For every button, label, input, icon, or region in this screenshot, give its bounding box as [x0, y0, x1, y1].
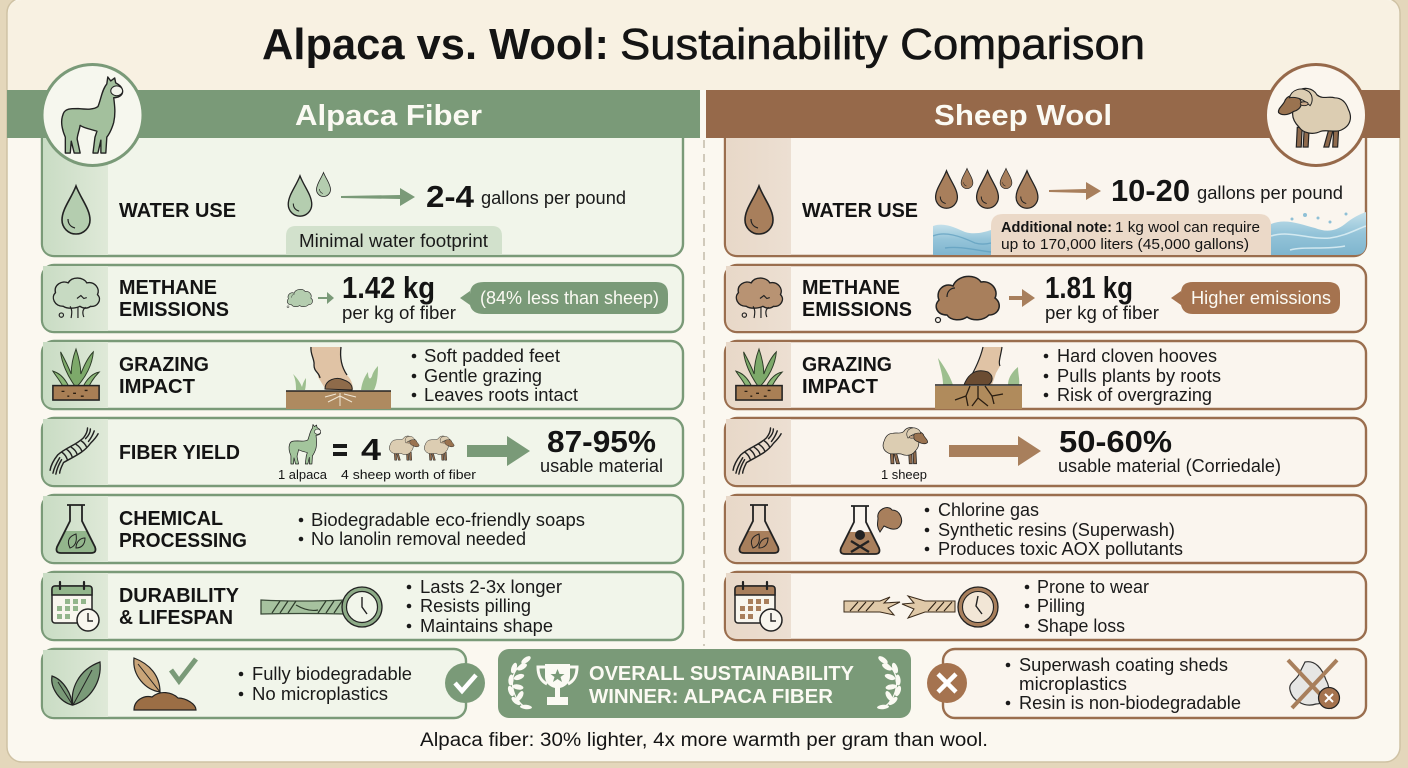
bullets: durability: Resists pilling	[420, 596, 531, 616]
winner text	[589, 663, 855, 708]
sheep icon and caption: 1 sheep	[881, 467, 927, 482]
icon: laurel right	[877, 655, 902, 710]
label: methane emissions: EMISSIONS	[802, 298, 912, 321]
value: 10-20 gallons: 10-20	[1111, 173, 1190, 208]
bullets: durability: Shape loss	[1037, 616, 1125, 636]
label: fiber yield: FIBER YIELD	[119, 441, 240, 464]
row: methane (alpaca)	[42, 265, 683, 332]
winner text: WINNER: ALPACA FIBER	[589, 686, 834, 708]
icon: water drop	[745, 186, 773, 234]
header: sheep wool	[706, 90, 1400, 138]
row: grazing (wool)	[725, 341, 1366, 409]
alpaca equals four sheep: 1 alpaca	[278, 467, 328, 482]
alpaca equals four sheep: 4 sheep worth of fiber	[341, 467, 477, 482]
value: 1.42 kg: 1.42 kg	[342, 270, 435, 305]
value: 87-95%	[540, 424, 663, 476]
icon: x badge	[927, 663, 967, 703]
row: grazing (alpaca)	[42, 341, 683, 409]
arrow	[1049, 182, 1101, 200]
icon: calendar	[735, 582, 782, 631]
bullets: grazing: Pulls plants by roots	[1057, 366, 1221, 386]
icon: plant with check	[134, 658, 196, 710]
icon: water drop	[62, 186, 90, 234]
center dashed divider	[703, 140, 705, 646]
title	[262, 20, 1145, 69]
icon: fiber	[50, 428, 98, 474]
footer note: Alpaca fiber: 30% lighter, 4x more warmth per gram than wool.	[420, 730, 988, 751]
bullets: durability: Pilling	[1037, 596, 1085, 616]
value: 2-4 gallons	[426, 179, 626, 214]
icon: leaves	[52, 662, 100, 705]
bullets: grazing	[412, 346, 578, 405]
bullets: grazing: Soft padded feet	[424, 346, 560, 366]
icon: methane cloud	[736, 278, 782, 318]
value: 1.81 kg	[1045, 270, 1159, 323]
icon: flask with leaf	[740, 505, 778, 553]
row: chemical (wool)	[725, 495, 1366, 563]
label: durability: DURABILITY	[119, 584, 239, 607]
header: alpaca fiber: Alpaca Fiber	[295, 100, 482, 132]
alpaca equals four sheep	[278, 425, 477, 482]
value: 10-20 gallons: gallons per pound	[1197, 183, 1343, 203]
illustration: hoof on soil	[935, 347, 1022, 409]
label: methane emissions	[802, 276, 912, 321]
bullets: microplastics: Superwash coating sheds	[1019, 655, 1228, 675]
label: chemical processing: PROCESSING	[119, 529, 247, 552]
bullets: grazing: Leaves roots intact	[424, 385, 578, 405]
arrow	[341, 188, 415, 206]
bullets: chemical: Biodegradable eco-friendly soaps	[311, 510, 585, 530]
note box: 1 kg wool can require	[1115, 220, 1260, 236]
bullets: chemical	[299, 510, 585, 549]
value: 2-4 gallons: 2-4	[426, 179, 475, 214]
note box: Additional note:	[1001, 220, 1112, 236]
illustration: soft foot on soil	[286, 347, 391, 409]
panel: overall winner	[498, 649, 911, 718]
icon: methane cloud	[53, 278, 99, 318]
label: durability	[119, 584, 239, 629]
icon: small cloud and arrow	[287, 289, 334, 308]
value: 1.81 kg: 1.81 kg	[1045, 270, 1133, 305]
illustration: frayed rope and clock	[844, 587, 998, 627]
bullets: durability: Maintains shape	[420, 616, 553, 636]
bullets: grazing: Hard cloven hooves	[1057, 346, 1217, 366]
icon: crossed microplastic	[1288, 660, 1340, 708]
bullets: microplastics	[1006, 655, 1241, 713]
row: water use (wool)	[724, 138, 1368, 258]
label: methane emissions: METHANE	[119, 276, 217, 299]
label: grazing impact: IMPACT	[802, 375, 878, 398]
label: grazing impact: GRAZING	[802, 353, 892, 376]
icon: calendar	[52, 582, 99, 631]
row: durability (wool)	[725, 572, 1366, 640]
row: water use (alpaca)	[42, 120, 683, 256]
header: alpaca fiber	[7, 90, 700, 138]
callout: 84% less: (84% less than sheep)	[480, 288, 659, 308]
bullets: chemical: Chlorine gas	[938, 500, 1039, 520]
value: 50-60%	[1058, 424, 1281, 476]
callout: 84% less	[460, 282, 668, 314]
value: 87-95%: 87-95%	[547, 424, 656, 459]
bullets: microplastics: Resin is non-biodegradable	[1019, 693, 1241, 713]
arrow	[949, 436, 1041, 466]
header: sheep wool: Sheep Wool	[934, 100, 1112, 132]
label: grazing impact	[802, 353, 892, 398]
note pill: Minimal water footprint	[299, 231, 488, 251]
label: grazing impact	[119, 353, 209, 398]
label: chemical processing: CHEMICAL	[119, 507, 223, 530]
bullets: grazing	[1044, 346, 1221, 405]
label: water use: WATER USE	[119, 199, 236, 222]
bullets: durability	[407, 577, 562, 636]
value: 87-95%: usable material	[540, 456, 663, 476]
icon: flask with leaf	[56, 505, 96, 553]
value: 2-4 gallons: gallons per pound	[481, 188, 626, 208]
winner text: OVERALL SUSTAINABILITY	[589, 663, 855, 685]
label: grazing impact: IMPACT	[119, 375, 195, 398]
label: water use: WATER USE	[802, 199, 918, 222]
value: 50-60%: usable material (Corriedale)	[1058, 456, 1281, 476]
icon: five drops	[936, 168, 1038, 208]
alpaca equals four sheep: 4	[361, 432, 382, 467]
icon: trophy	[538, 664, 577, 705]
note pill	[286, 226, 502, 255]
title: Alpaca vs. Wool:	[262, 20, 609, 69]
bullets: durability: Prone to wear	[1037, 577, 1149, 597]
bullets: microplastics: microplastics	[1019, 674, 1127, 694]
bullets: durability	[1025, 577, 1149, 636]
value: 1.81 kg: per kg of fiber	[1045, 303, 1159, 323]
bullets: chemical	[925, 500, 1183, 559]
icon: laurel left	[507, 655, 532, 710]
illustration: rope and watch	[261, 587, 382, 627]
value: 10-20 gallons	[1111, 173, 1343, 208]
label: chemical processing	[119, 507, 247, 552]
icon: grass	[736, 349, 782, 400]
arrow	[467, 436, 530, 466]
medallion: alpaca	[42, 64, 143, 166]
icon: toxic flask with fumes	[840, 506, 902, 554]
title: Sustainability Comparison	[620, 20, 1145, 69]
row: durability (alpaca)	[42, 572, 683, 640]
sheep icon and caption	[881, 427, 928, 482]
note box	[991, 214, 1271, 255]
panel: alpaca column	[42, 120, 683, 640]
label: durability: & LIFESPAN	[119, 606, 233, 629]
row: fiber yield (alpaca)	[42, 418, 683, 486]
bullets: biodegradable: Fully biodegradable	[252, 664, 412, 684]
row: methane (wool)	[725, 265, 1366, 332]
panel: biodegradability (alpaca)	[42, 649, 485, 718]
label: methane emissions: METHANE	[802, 276, 900, 299]
row: fiber yield (wool)	[725, 418, 1366, 486]
panel: biodegradability (wool)	[927, 649, 1366, 718]
bullets: chemical: Produces toxic AOX pollutants	[938, 539, 1183, 559]
label: methane emissions: EMISSIONS	[119, 298, 229, 321]
note box: up to 170,000 liters (45,000 gallons)	[1001, 237, 1249, 253]
label: methane emissions	[119, 276, 229, 321]
icon: two drops	[288, 172, 330, 216]
value: 1.42 kg	[342, 270, 456, 323]
callout: higher emissions	[1171, 282, 1340, 314]
callout: higher emissions: Higher emissions	[1191, 288, 1331, 308]
label: grazing impact: GRAZING	[119, 353, 209, 376]
bullets: durability: Lasts 2-3x longer	[420, 577, 562, 597]
value: 50-60%: 50-60%	[1059, 424, 1172, 459]
icon: fiber	[733, 428, 781, 474]
panel: wool column	[725, 120, 1366, 640]
bullets: chemical: Synthetic resins (Superwash)	[938, 520, 1175, 540]
value: 1.42 kg: per kg of fiber	[342, 303, 456, 323]
bullets: grazing: Risk of overgrazing	[1057, 385, 1212, 405]
medallion: sheep	[1266, 64, 1366, 166]
bullets: grazing: Gentle grazing	[424, 366, 542, 386]
icon: grass	[53, 349, 99, 400]
icon: large cloud and arrow	[936, 276, 1035, 322]
water waves	[933, 212, 1366, 255]
row: chemical (alpaca)	[42, 495, 683, 563]
icon: check badge	[445, 663, 485, 703]
bullets: biodegradable	[239, 664, 412, 704]
bullets: chemical: No lanolin removal needed	[311, 529, 526, 549]
bullets: biodegradable: No microplastics	[252, 684, 388, 704]
